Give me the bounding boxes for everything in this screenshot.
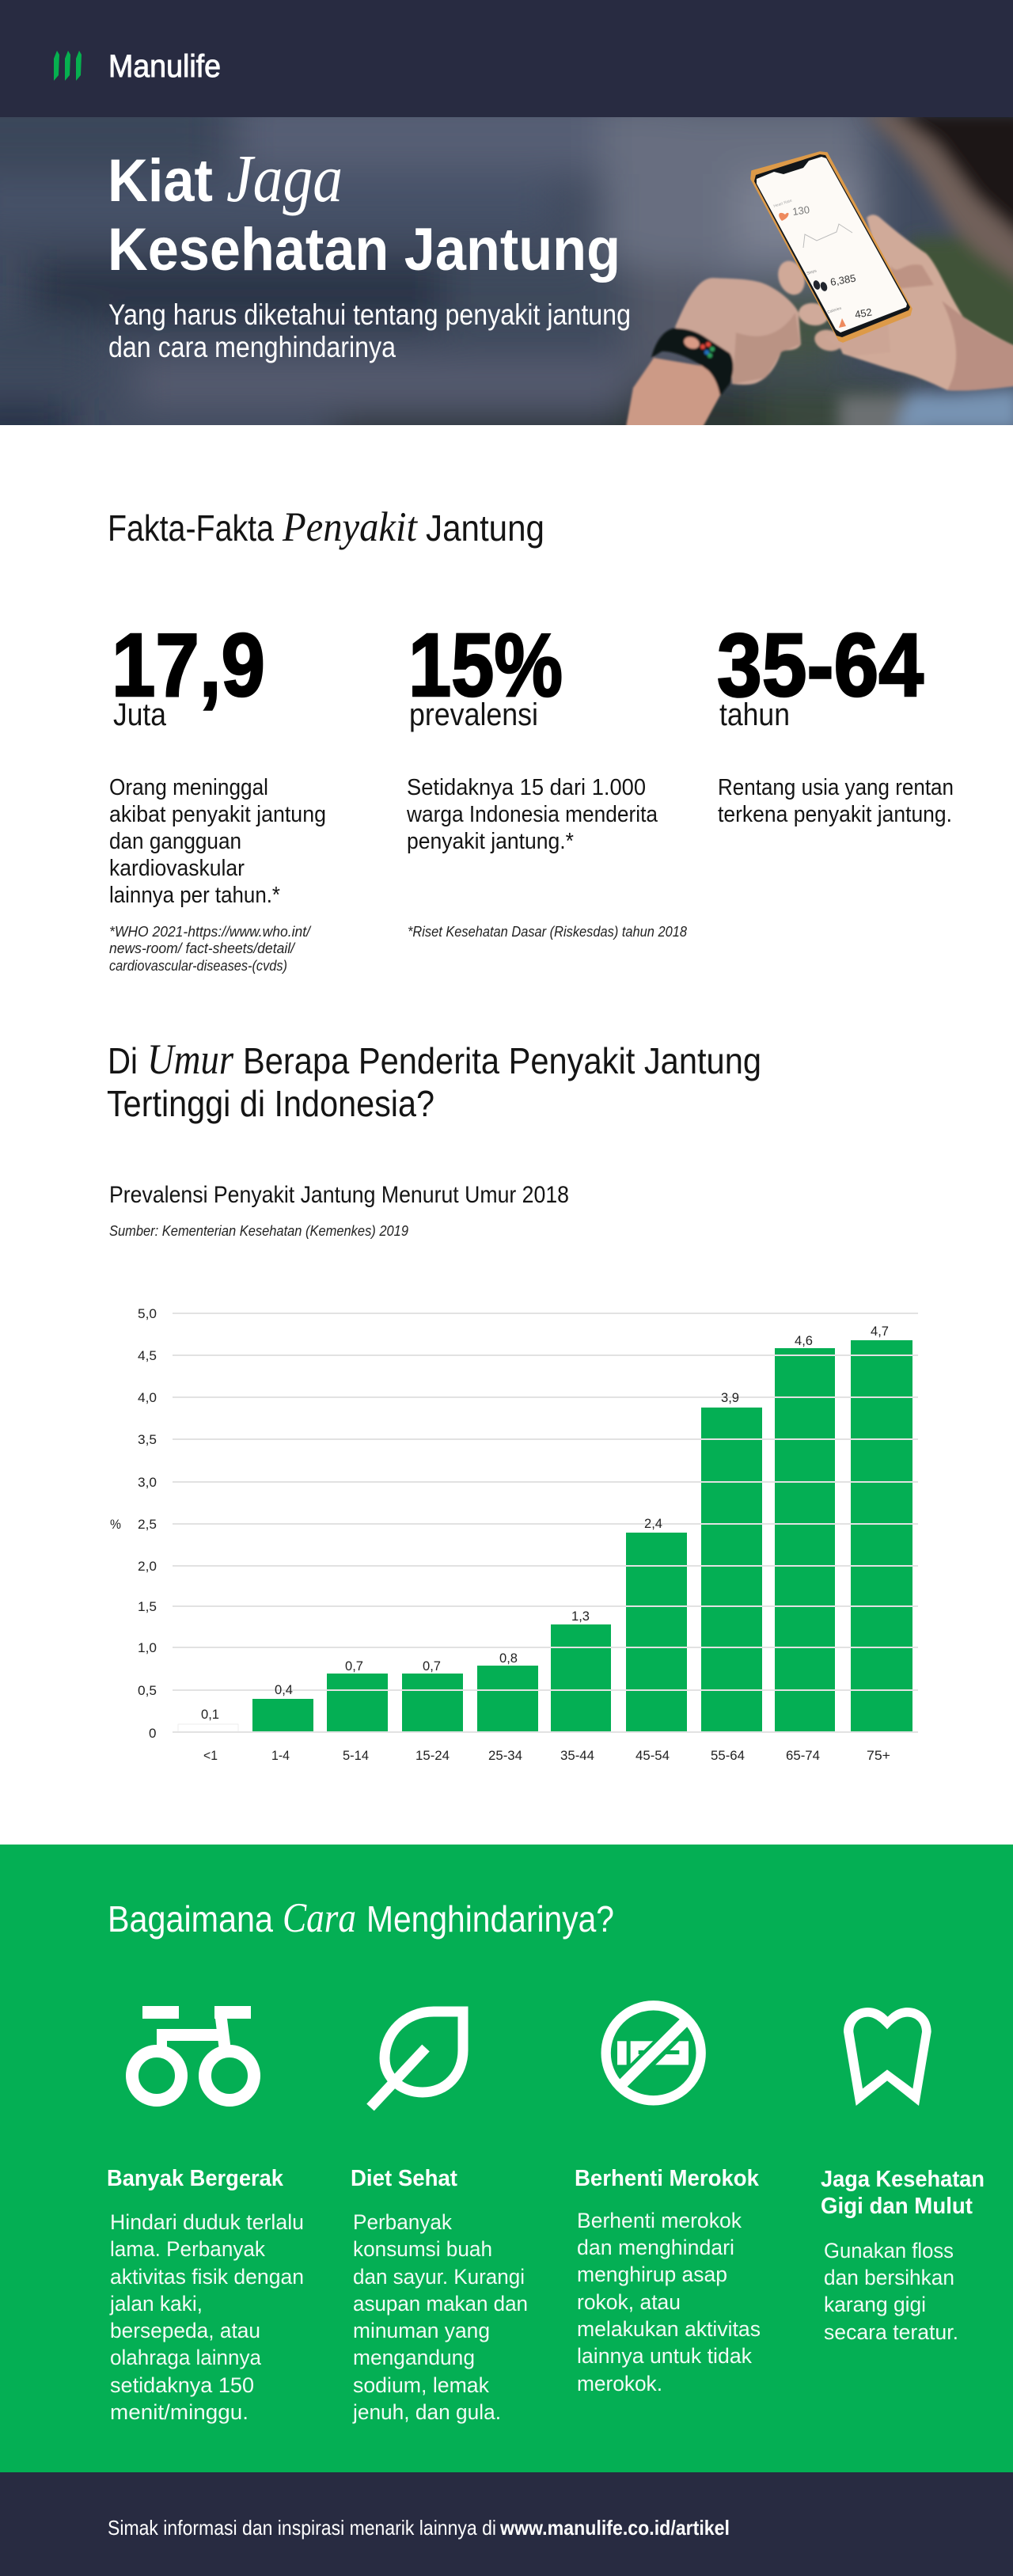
tip: Diet Sehat: Diet Sehat: [351, 2166, 457, 2191]
stat: 17,9 juta: kardiovaskular: [109, 856, 245, 881]
tip: Banyak Bergerak: Banyak Bergerak: [107, 2166, 284, 2191]
y axis labels: 0: [149, 1726, 156, 1741]
hero title: [108, 140, 620, 283]
stat: 35-64 tahun: Rentang usia yang rentan: [718, 775, 954, 800]
hero title: Kesehatan Jantung: [108, 216, 620, 283]
tip: Diet Sehat: minuman yang: [353, 2319, 490, 2342]
stat: 15% prevalensi: penyakit jantung.*: [407, 829, 574, 854]
stat: 15% prevalensi: 15%: [408, 615, 563, 715]
footer text: www.manulife.co.id/artikel: [499, 2516, 730, 2540]
bar chart: [110, 1306, 918, 1763]
x axis labels: 5-14: [343, 1748, 369, 1763]
header bar with logo: [0, 0, 1013, 117]
stat: 15% prevalensi: warga Indonesia menderita: [406, 802, 658, 827]
bar value labels: 1,3: [571, 1609, 590, 1624]
bar value labels: 2,4: [644, 1516, 662, 1531]
tip: Diet Sehat: dan sayur. Kurangi: [353, 2265, 525, 2289]
stat: 17,9 juta: lainnya per tahun.*: [109, 883, 280, 908]
bar value labels: 0,1: [201, 1707, 219, 1722]
stat: 15% prevalensi: [406, 615, 687, 940]
heading: age question: Tertinggi di Indonesia?: [107, 1083, 434, 1124]
footnote: WHO: news-room/ fact-sheets/detail/: [109, 940, 296, 956]
bar value labels: [201, 1324, 889, 1722]
x axis labels: 25-34: [488, 1748, 522, 1763]
panel: how to avoid: [0, 1845, 1013, 2473]
stat: 17,9 juta: akibat penyakit jantung: [109, 802, 326, 827]
bar value labels: 0,4: [275, 1682, 293, 1697]
heading: age question: [107, 1035, 761, 1124]
chart title: Prevalensi Penyakit Jantung Menurut Umur 2018: [109, 1182, 569, 1208]
tip: Banyak Bergerak: aktivitas fisik dengan: [110, 2265, 304, 2289]
icon: leaf: [370, 2012, 463, 2107]
y axis labels: 3,5: [138, 1432, 157, 1447]
logo wordmark: Manulife: [108, 49, 221, 84]
tip: Jaga Kesehatan Gigi dan Mulut: Gigi dan Mulut: [821, 2194, 973, 2219]
hero title: Jaga: [226, 140, 343, 216]
phone screen content: Steps: [806, 268, 818, 276]
bar value labels: 3,9: [721, 1390, 739, 1405]
hero photo: hands with phone and fitness band: [0, 117, 1013, 425]
heading: facts: Penyakit: [282, 504, 418, 550]
stat: 17,9 juta: 17,9: [112, 615, 265, 715]
tip: Berhenti Merokok: merokok.: [577, 2372, 662, 2396]
heading: how to avoid: [108, 1895, 614, 1941]
footnote: WHO: [109, 924, 312, 974]
footer text: Simak informasi dan inspirasi menarik lainnya di: [108, 2516, 496, 2540]
left arm and fist: [625, 215, 1013, 431]
tip: Berhenti Merokok: dan menghindari: [577, 2236, 734, 2259]
tip: Jaga Kesehatan Gigi dan Mulut: Jaga Kesehatan: [821, 2167, 985, 2192]
x axis labels: 65-74: [786, 1748, 820, 1763]
heading: facts: Jantung: [426, 507, 544, 549]
tip: Banyak Bergerak: jalan kaki,: [109, 2292, 203, 2316]
stat: 35-64 tahun: [717, 615, 954, 827]
tip: Berhenti Merokok: rokok, atau: [577, 2290, 681, 2314]
smartphone: [751, 152, 912, 342]
y axis labels: 2,5: [138, 1517, 157, 1532]
chart source: Sumber: Kementerian Kesehatan (Kemenkes) 2019: [109, 1223, 408, 1239]
fitness band: [651, 329, 733, 396]
y axis labels: %: [110, 1517, 121, 1532]
hero subtitle: Yang harus diketahui tentang penyakit jantung: [108, 298, 631, 331]
tip: Berhenti Merokok: Berhenti Merokok: [575, 2166, 760, 2191]
stat: 17,9 juta: Juta: [113, 697, 167, 732]
footnote: WHO: *WHO 2021-https://www.who.int/: [109, 924, 312, 940]
stat: 35-64 tahun: tahun: [719, 697, 790, 732]
grid lines: [173, 1313, 918, 1732]
tip: Banyak Bergerak: bersepeda, atau: [110, 2319, 260, 2342]
y axis labels: 1,0: [138, 1640, 157, 1655]
footer: [0, 2472, 1013, 2576]
footnote: WHO: cardiovascular-diseases-(cvds): [109, 958, 287, 974]
heading: facts: Fakta-Fakta: [108, 507, 274, 549]
tip: Diet Sehat: asupan makan dan: [353, 2292, 528, 2316]
x axis labels: 55-64: [711, 1748, 745, 1763]
tip: Banyak Bergerak: menit/minggu.: [110, 2400, 249, 2424]
heading: how to avoid: Bagaimana: [108, 1898, 273, 1940]
y axis labels: 3,0: [138, 1475, 157, 1490]
stat: 17,9 juta: dan gangguan: [109, 829, 241, 854]
tip: Jaga Kesehatan Gigi dan Mulut: Gunakan floss: [824, 2239, 954, 2263]
tip: Jaga Kesehatan Gigi dan Mulut: karang gigi: [824, 2293, 926, 2316]
icon: no smoking: [606, 2005, 701, 2100]
heading: how to avoid: Cara: [283, 1895, 356, 1941]
icon: Manulife logo mark: [54, 51, 82, 81]
bars: [178, 1340, 912, 1732]
y axis labels: 5,0: [138, 1306, 157, 1321]
x axis labels: [203, 1748, 890, 1763]
y axis labels: 4,5: [138, 1348, 157, 1363]
y axis labels: 2,0: [138, 1559, 157, 1574]
heading: age question: Berapa Penderita Penyakit Jantung: [243, 1040, 761, 1081]
stat: 15% prevalensi: Setidaknya 15 dari 1.000: [407, 775, 646, 800]
phone screen content: 6,385: [829, 272, 857, 288]
heading: age question: Umur: [147, 1035, 234, 1083]
tip: Jaga Kesehatan Gigi dan Mulut: secara teratur.: [824, 2320, 958, 2344]
tip: Diet Sehat: konsumsi buah: [353, 2237, 492, 2261]
stat: 17,9 juta: [109, 615, 326, 974]
tip: Jaga Kesehatan Gigi dan Mulut: [821, 2167, 985, 2344]
phone screen content: Calories: [827, 306, 843, 315]
bar value labels: 0,7: [423, 1658, 441, 1674]
tip: Banyak Bergerak: lama. Perbanyak: [110, 2237, 265, 2261]
tip: Berhenti Merokok: Berhenti merokok: [577, 2209, 742, 2232]
y axis labels: [110, 1306, 157, 1741]
phone screen content: Heart Rate: [773, 199, 793, 209]
heading: how to avoid: Menghindarinya?: [366, 1898, 614, 1940]
tip: Jaga Kesehatan Gigi dan Mulut: dan bersihkan: [824, 2266, 954, 2289]
phone screen content: [773, 199, 873, 328]
y axis labels: 4,0: [138, 1390, 157, 1405]
x axis labels: 1-4: [271, 1748, 290, 1763]
tip: Diet Sehat: jenuh, dan gula.: [352, 2400, 501, 2424]
tip: Berhenti Merokok: [575, 2166, 761, 2396]
stat: 35-64 tahun: 35-64: [717, 615, 924, 715]
stat: 35-64 tahun: terkena penyakit jantung.: [718, 802, 952, 827]
right hand: [835, 215, 1013, 390]
x axis labels: 35-44: [560, 1748, 594, 1763]
tip: Diet Sehat: sodium, lemak: [353, 2373, 489, 2397]
phone screen content: 452: [854, 306, 873, 321]
tip: Berhenti Merokok: melakukan aktivitas: [577, 2317, 761, 2341]
icon: tooth: [844, 2008, 931, 2106]
tip: Banyak Bergerak: setidaknya 150: [110, 2373, 254, 2397]
bar value labels: 4,7: [871, 1324, 889, 1339]
y axis labels: 0,5: [138, 1683, 157, 1698]
tip: Banyak Bergerak: Hindari duduk terlalu: [110, 2210, 304, 2234]
heading: facts: [108, 504, 544, 550]
tip: Diet Sehat: mengandung: [353, 2346, 475, 2369]
x axis labels: 75+: [867, 1748, 890, 1763]
stat: 17,9 juta: Orang meninggal: [109, 775, 268, 800]
footnote: Riskesdas: *Riset Kesehatan Dasar (Riskesdas) tahun 2018: [408, 924, 687, 940]
tip: Diet Sehat: [351, 2166, 528, 2424]
tip: Berhenti Merokok: menghirup asap: [577, 2263, 727, 2286]
hero subtitle: [108, 298, 631, 363]
icon: bicycle: [132, 2006, 254, 2100]
hero title: Kiat: [108, 147, 213, 215]
x axis labels: <1: [203, 1748, 218, 1763]
hero subtitle: dan cara menghindarinya: [108, 331, 396, 363]
tip: Banyak Bergerak: [107, 2166, 304, 2424]
x axis labels: 15-24: [415, 1748, 450, 1763]
bar value labels: 0,8: [499, 1651, 518, 1666]
phone screen content: 130: [791, 203, 810, 218]
heading: age question: Di: [108, 1040, 138, 1081]
tip: Diet Sehat: Perbanyak: [353, 2210, 452, 2234]
tip: Banyak Bergerak: olahraga lainnya: [110, 2346, 262, 2369]
bar value labels: 0,7: [345, 1658, 363, 1674]
x axis labels: 45-54: [635, 1748, 670, 1763]
tip: Berhenti Merokok: lainnya untuk tidak: [577, 2344, 752, 2368]
y axis labels: 1,5: [138, 1599, 157, 1614]
bar value labels: 4,6: [795, 1333, 813, 1348]
stat: 15% prevalensi: prevalensi: [409, 697, 538, 732]
